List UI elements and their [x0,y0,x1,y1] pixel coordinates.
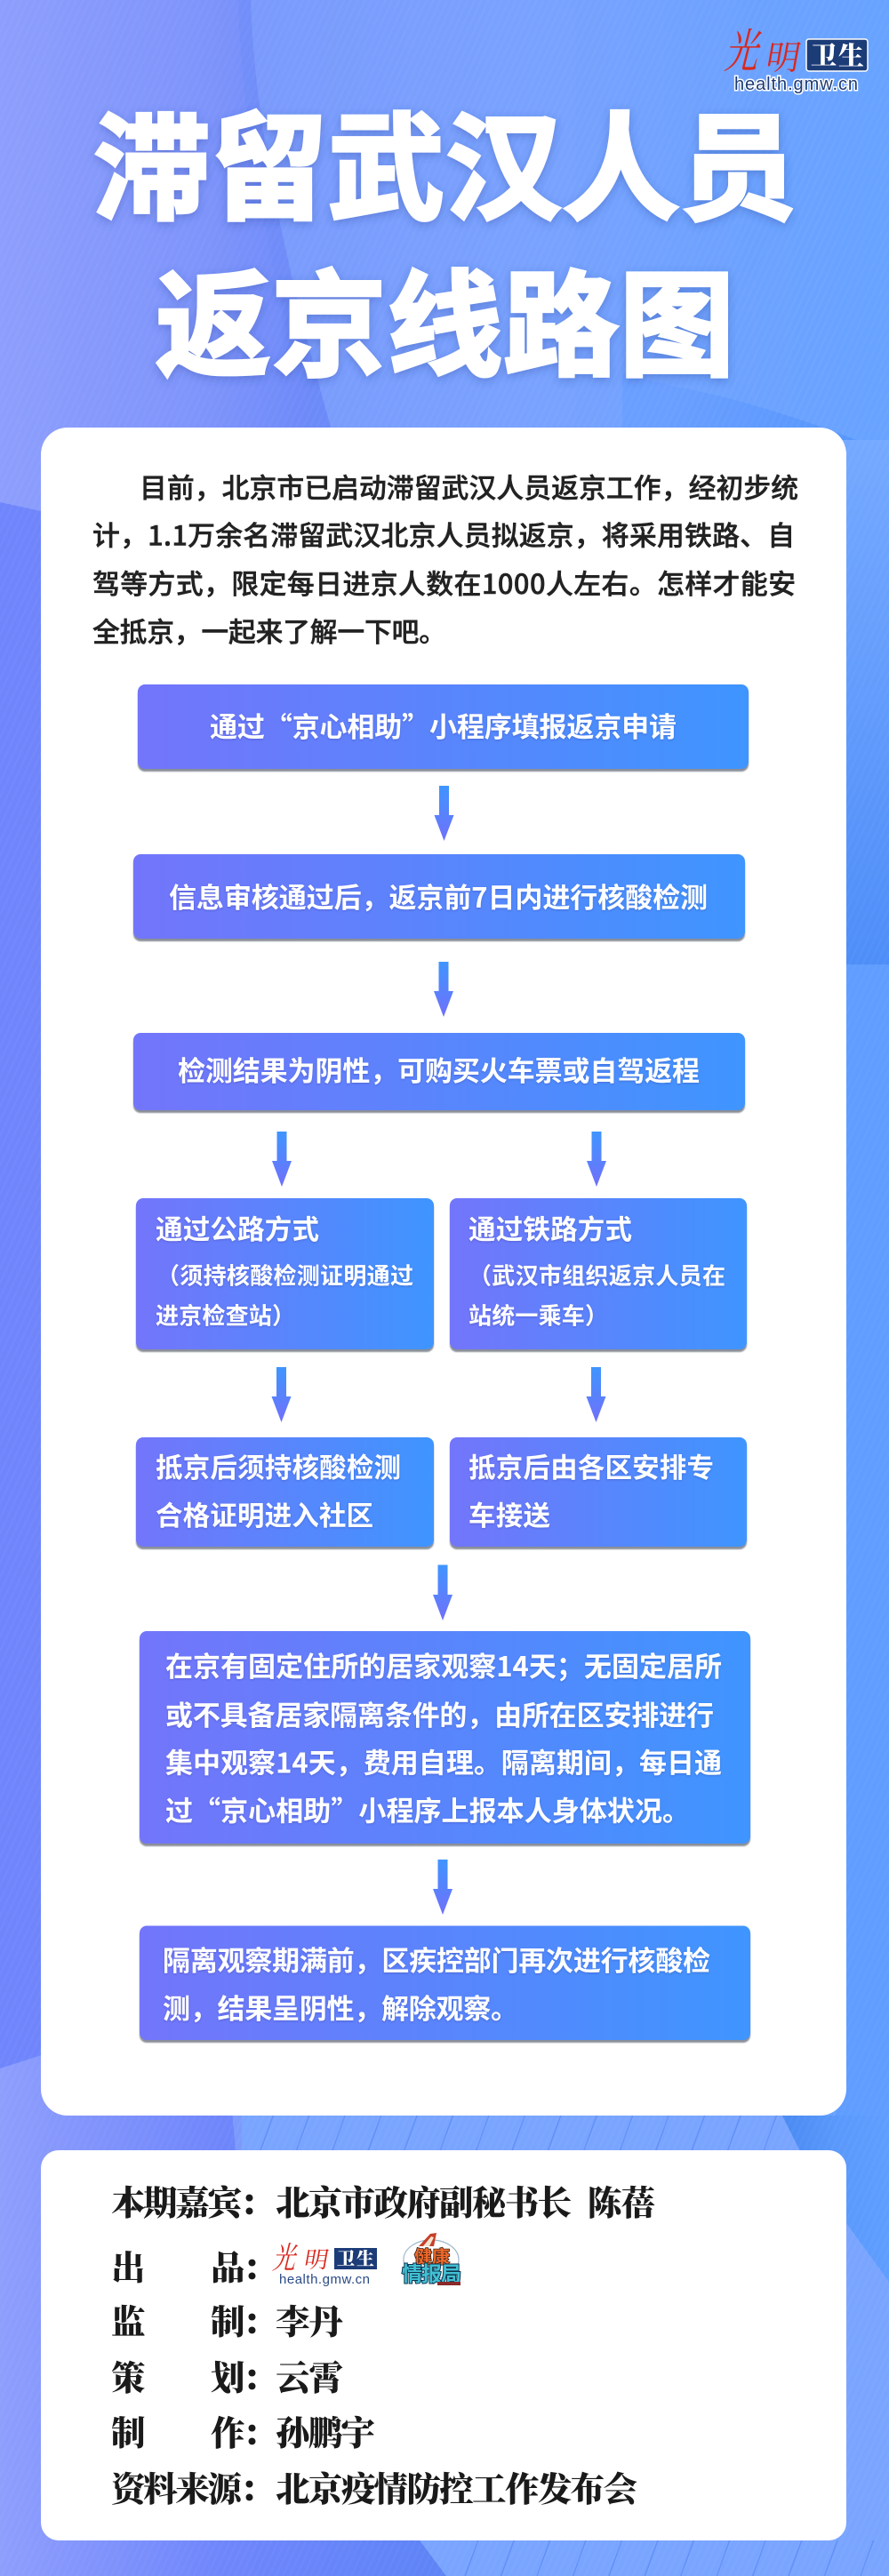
road route box: 通过公路方式 [156,1208,319,1247]
step 3: 检测结果为阴性，可购买火车票或自驾返程 [178,1049,700,1089]
step 1 [138,684,749,772]
arrow [434,786,453,841]
logo: Guangming Health small: 光 [269,2233,304,2277]
planner row: 划： [211,2352,276,2401]
source row: 资料来源： [111,2463,274,2512]
supervisor row [111,2296,343,2345]
rail arrival box: 抵京后由各区安排专 [469,1446,714,1485]
guest row [111,2177,655,2226]
title line 1: 滞留武汉人员 [93,75,797,244]
intro text: 计，1.1万余名滞留武汉北京人员拟返京，将采用铁路、自 [92,514,795,553]
step 1: 通过“京心相助”小程序填报返京申请 [210,705,677,745]
logo: Guangming Health small: 明 [302,2241,332,2275]
release box: 隔离观察期满前，区疾控部门再次进行核酸检 [163,1939,710,1979]
producer row [111,2242,276,2291]
source row [111,2463,638,2512]
release box [140,1925,750,2043]
source row: 北京疫情防控工作发布会 [276,2463,638,2512]
observation box: 集中观察14天，费用自理。隔离期间，每日通 [165,1740,722,1781]
logo: Guangming Health top right [720,14,868,94]
maker row: 孙鹏宇 [276,2407,375,2456]
intro text: 驾等方式，限定每日进京人数在1000人左右。怎样才能安 [92,562,796,602]
producer row: 品： [211,2242,276,2291]
guest row: 北京市政府副秘书长 [276,2177,572,2226]
road arrival box [136,1437,434,1549]
logo: health intelligence bureau: 健康 [414,2243,450,2268]
logo: Guangming Health small: health.gmw.cn [279,2272,370,2287]
supervisor row: 制： [211,2296,276,2345]
observation box: 过“京心相助”小程序上报本人身体状况。 [165,1789,690,1829]
producer row: 出 [111,2242,146,2291]
panel: credits [41,2150,846,2540]
maker row: 制 [111,2407,146,2456]
panel: main [41,428,846,2116]
step 2 [133,854,745,941]
guest row: 陈蓓 [588,2177,655,2226]
rail route box: （武汉市组织返京人员在 [469,1259,725,1291]
release box: 测，结果呈阴性，解除观察。 [163,1987,518,2027]
intro text: 目前，北京市已启动滞留武汉人员返京工作，经初步统 [140,466,798,506]
rail arrival box: 车接送 [469,1494,550,1533]
logo calligraphy: 光 [720,14,770,82]
logo: Guangming Health small: 卫生 [337,2244,374,2270]
road arrival box: 合格证明进入社区 [156,1494,373,1533]
rail arrival box [450,1437,747,1549]
title line 2: 返京线路图 [156,234,734,400]
arrow [433,1860,453,1915]
step 3 [133,1033,745,1113]
observation box: 在京有固定住所的居家观察14天；无固定居所 [165,1644,722,1684]
logo: health intelligence bureau [402,2233,461,2287]
planner row [111,2352,343,2401]
logo calligraphy [720,14,805,82]
logo: Guangming Health small [269,2233,377,2287]
road route box: 进京检查站） [156,1298,295,1332]
guest row: 本期嘉宾： [111,2177,274,2226]
road route box [136,1198,434,1352]
title [93,75,797,400]
logo: health intelligence bureau: 情报局 [402,2257,461,2287]
supervisor row: 监 [111,2296,146,2345]
maker row: 作： [211,2407,276,2456]
supervisor row: 李丹 [276,2296,343,2345]
logo url: health.gmw.cn [734,75,858,94]
arrow [434,962,453,1017]
arrow: right branch [587,1367,606,1422]
arrow [433,1564,453,1620]
rail route box: 通过铁路方式 [469,1208,632,1247]
rail route box [450,1198,747,1352]
arrow: left branch [272,1132,292,1187]
planner row: 策 [111,2352,146,2401]
step 2: 信息审核通过后，返京前7日内进行核酸检测 [169,876,708,916]
logo calligraphy: 明 [763,30,805,79]
arrow: right branch [587,1132,606,1187]
rail route box: 站统一乘车） [469,1298,608,1332]
arrow: left branch [272,1367,292,1422]
intro text [92,466,798,650]
observation box: 或不具备居家隔离条件的，由所在区安排进行 [165,1693,714,1733]
logo badge: 卫生 [811,36,864,73]
road route box: （须持核酸检测证明通过 [156,1259,413,1291]
maker row [111,2407,375,2456]
road arrival box: 抵京后须持核酸检测 [156,1446,401,1485]
planner row: 云霄 [276,2352,343,2401]
intro text: 全抵京，一起来了解一下吧。 [92,610,446,650]
observation box [140,1631,750,1846]
